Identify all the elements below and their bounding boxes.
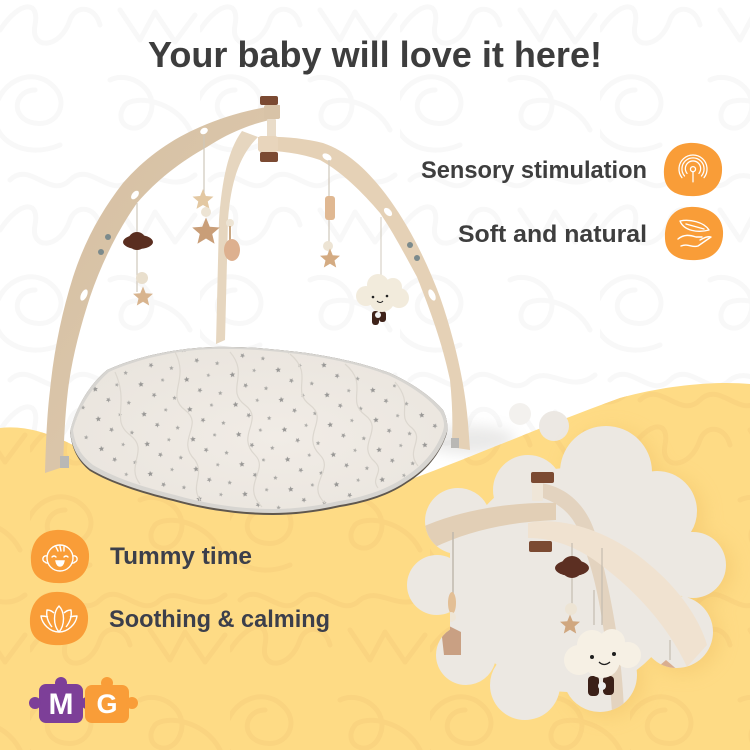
- hanging toy: moon rattle: [224, 219, 240, 261]
- left toy string and star: [442, 532, 461, 655]
- purple M piece: [29, 677, 93, 723]
- feature: sensory stimulation: [421, 143, 722, 196]
- cloud inset shadow: [566, 430, 732, 716]
- yellow wave panel: [0, 383, 750, 750]
- feature: soothing and calming: [30, 592, 330, 645]
- arch holes and screws: [60, 126, 459, 468]
- hanging toy: two stars: [192, 135, 220, 244]
- hanging toy: plush cloud: [356, 217, 409, 325]
- center toy: chocolate planet and star: [555, 543, 589, 634]
- feature: soothing and calming: Soothing & calming: [109, 606, 330, 633]
- top joint pegs: [258, 96, 280, 162]
- icon: hand and leaf: [665, 207, 723, 260]
- orange G piece: [85, 677, 138, 723]
- logo: MG puzzle pieces: G: [96, 689, 118, 719]
- right hanging strings and toy: [594, 548, 680, 672]
- thought bubbles: [509, 403, 569, 441]
- back arch leg: [216, 131, 258, 344]
- icon: signal antenna: [664, 143, 722, 196]
- right arch: [258, 137, 470, 450]
- left arch: [45, 105, 280, 473]
- play gym product photo: [45, 96, 470, 515]
- upper-left arm: [420, 503, 556, 548]
- lower-right arm: [528, 521, 707, 667]
- wooden pegs: [529, 472, 554, 552]
- icon: baby face: [31, 530, 89, 583]
- logo: MG puzzle pieces: M: [48, 688, 74, 721]
- feature: tummy time: [31, 530, 252, 583]
- cloud inset: close-up of toys: [407, 426, 726, 720]
- title: Your baby will love it here!: [148, 34, 602, 75]
- hanging toy: chocolate planet and star: [123, 203, 153, 306]
- feature: tummy time: Tummy time: [110, 543, 252, 570]
- feature: sensory stimulation: Sensory stimulation: [421, 157, 647, 184]
- play mat: [70, 347, 447, 515]
- logo: MG puzzle pieces: [29, 677, 138, 723]
- plush cloud close-up: [564, 629, 641, 696]
- floor shadow: [424, 426, 516, 454]
- hanging toy: wood piece and star: [320, 160, 340, 268]
- back arm: [540, 483, 624, 712]
- feature: soft and natural: [458, 207, 723, 260]
- feature: soft and natural: Soft and natural: [458, 221, 647, 248]
- icon: lotus: [30, 592, 88, 645]
